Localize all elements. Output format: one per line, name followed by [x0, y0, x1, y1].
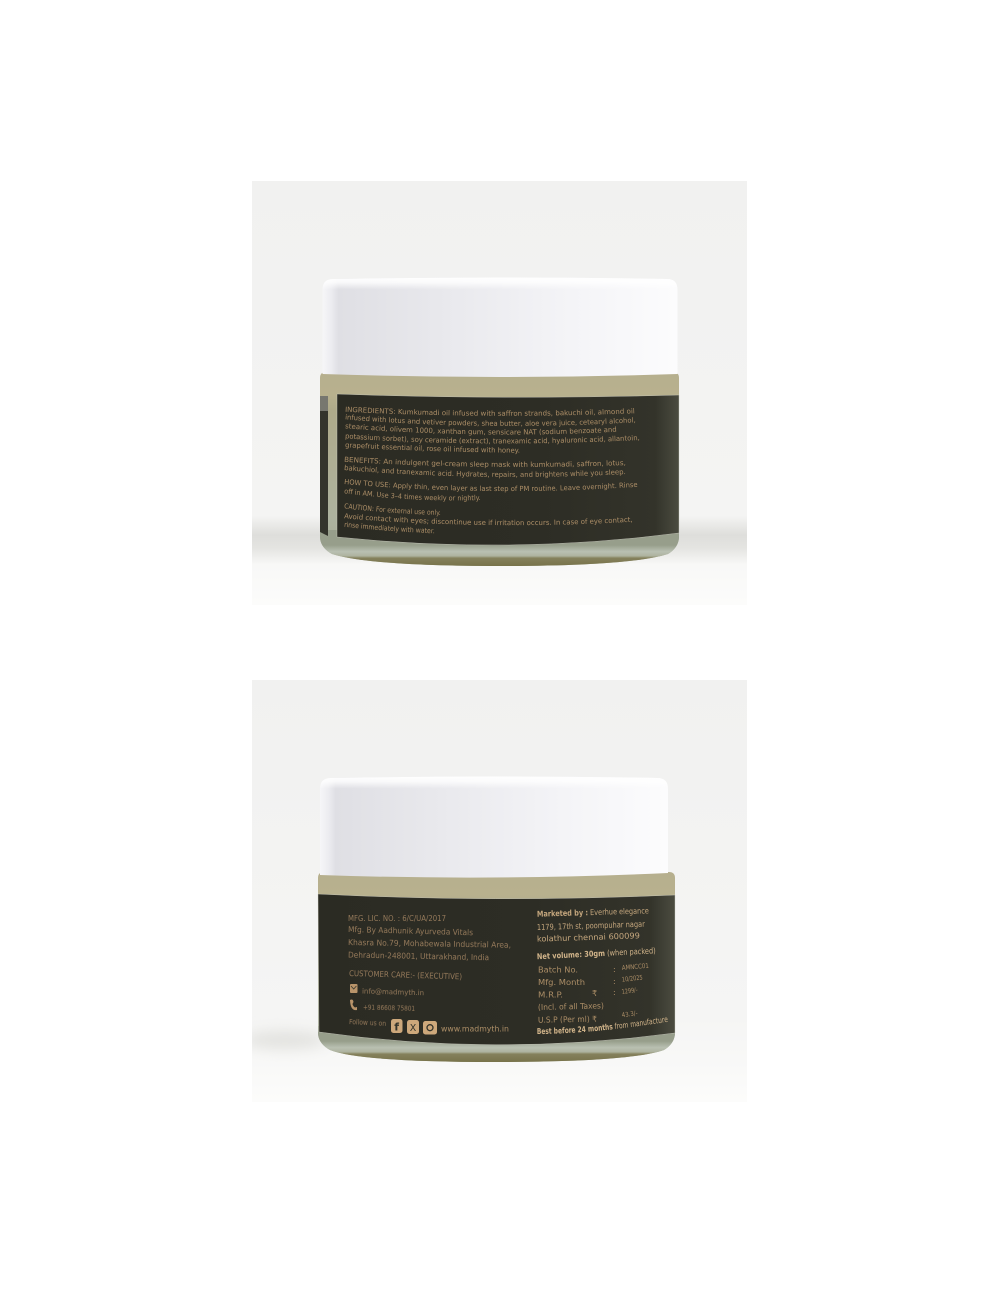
- jar glass base: [320, 530, 679, 566]
- product details: ₹: [592, 989, 597, 998]
- icon: email: [350, 984, 358, 993]
- how to use text: [344, 479, 638, 502]
- manufacturer text: CUSTOMER CARE:- (EXECUTIVE): [349, 969, 462, 981]
- ingredients text: INGREDIENTS: Kumkumadi oil infused with saffron strands, bakuchi oil, almond oil: [346, 406, 634, 416]
- jar body: [320, 372, 679, 566]
- photo panel: jar with ingredients label: [252, 181, 747, 566]
- product details: :: [613, 977, 616, 986]
- product details: (Incl. of all Taxes): [538, 1001, 604, 1012]
- benefits text: bakuchiol, and tranexamic acid. Hydrates, repairs, and brightens while you sleep.: [344, 464, 626, 478]
- icon: phone: [350, 1000, 357, 1010]
- icon: X: [407, 1020, 419, 1034]
- icon: instagram: [423, 1021, 437, 1034]
- product details: 1299/-: [621, 986, 639, 996]
- ingredients text: infused with lotus and vetiver powders, shea butter, aloe vera juice, cetearyl alcohol,: [346, 414, 636, 427]
- caution text: CAUTION: For external use only.: [344, 503, 440, 516]
- ingredients text: potassium sorbet), soy ceramide (extract), tranexamic acid, hyaluronic acid, allantoin,: [346, 434, 640, 444]
- photo panel: jar with manufacturer label: [252, 680, 747, 1064]
- follow us label: Follow us on: [349, 1018, 386, 1028]
- marketed by text: kolathur chennai 600099: [537, 931, 640, 944]
- how to use text: off in AM. Use 3–4 times weekly or nightly.: [344, 488, 480, 502]
- manufacturer text: Khasra No.79, Mohabewala Industrial Area,: [348, 938, 511, 950]
- caution text: Avoid contact with eyes; discontinue use if irritation occurs. In case of eye contact,: [344, 513, 632, 526]
- product details: [537, 946, 668, 1034]
- product details: :: [613, 988, 616, 997]
- jar lid: [320, 776, 668, 878]
- manufacturer text: Dehradun-248001, Uttarakhand, India: [348, 951, 489, 962]
- benefits text: BENEFITS: An indulgent gel-cream sleep mask with kumkumadi, saffron, lotus,: [344, 456, 626, 468]
- how to use text: HOW TO USE: Apply thin, even layer as last step of PM routine. Leave overnight. Rinse: [344, 479, 638, 492]
- photo background: [252, 680, 747, 1102]
- icon: facebook: [391, 1019, 402, 1034]
- main label: [337, 394, 679, 545]
- manufacturer text: Mfg. By Aadhunik Ayurveda Vitals: [348, 925, 473, 937]
- caution text: [344, 503, 632, 534]
- surface shadow: [243, 1031, 327, 1049]
- ingredients text: grapefruit essential oil, rose oil infused with honey.: [346, 443, 520, 454]
- phone number: +91 86608 75801: [363, 1004, 415, 1013]
- side label sliver: [320, 396, 328, 536]
- marketed by text: Marketed by : Everhue elegance: [537, 906, 649, 919]
- product details: 10/2025: [621, 974, 643, 984]
- manufacturer text: [348, 914, 511, 981]
- caution text: rinse immediately with water.: [344, 522, 434, 534]
- product details: :: [613, 965, 616, 974]
- website: www.madmyth.in: [441, 1025, 509, 1034]
- product details: Best before 24 months from manufacture: [537, 1018, 668, 1034]
- jar body: [318, 872, 675, 1062]
- benefits text: [344, 456, 626, 478]
- jar lid: [322, 278, 678, 377]
- product details: Net volume: 30gm (when packed): [537, 946, 656, 961]
- product details: Batch No.: [538, 966, 578, 975]
- photo background: [252, 181, 747, 605]
- product details: AMNCC01: [621, 962, 649, 972]
- ingredients text: [345, 406, 640, 454]
- product details: Mfg. Month: [538, 978, 585, 987]
- product details: M.R.P.: [538, 990, 563, 999]
- marketed by text: [537, 906, 649, 944]
- jar: [318, 776, 676, 1062]
- main label: [318, 894, 675, 1045]
- manufacturer text: MFG. LIC. NO. : 6/C/UA/2017: [348, 914, 446, 923]
- product details: 43.3/-: [621, 1009, 639, 1019]
- jar glass base: [318, 1026, 675, 1062]
- icon: X: X: [410, 1023, 417, 1034]
- ingredients text: stearic acid, olivem 1000, xanthan gum, sensicare NAT (sodium benzoate and: [345, 424, 616, 436]
- icon: facebook: f: [394, 1020, 399, 1034]
- marketed by text: 1179, 17th st, poompuhar nagar: [537, 920, 646, 932]
- jar: [320, 278, 680, 566]
- product details: U.S.P (Per ml) ₹: [538, 1015, 597, 1025]
- email address: info@madmyth.in: [362, 988, 424, 997]
